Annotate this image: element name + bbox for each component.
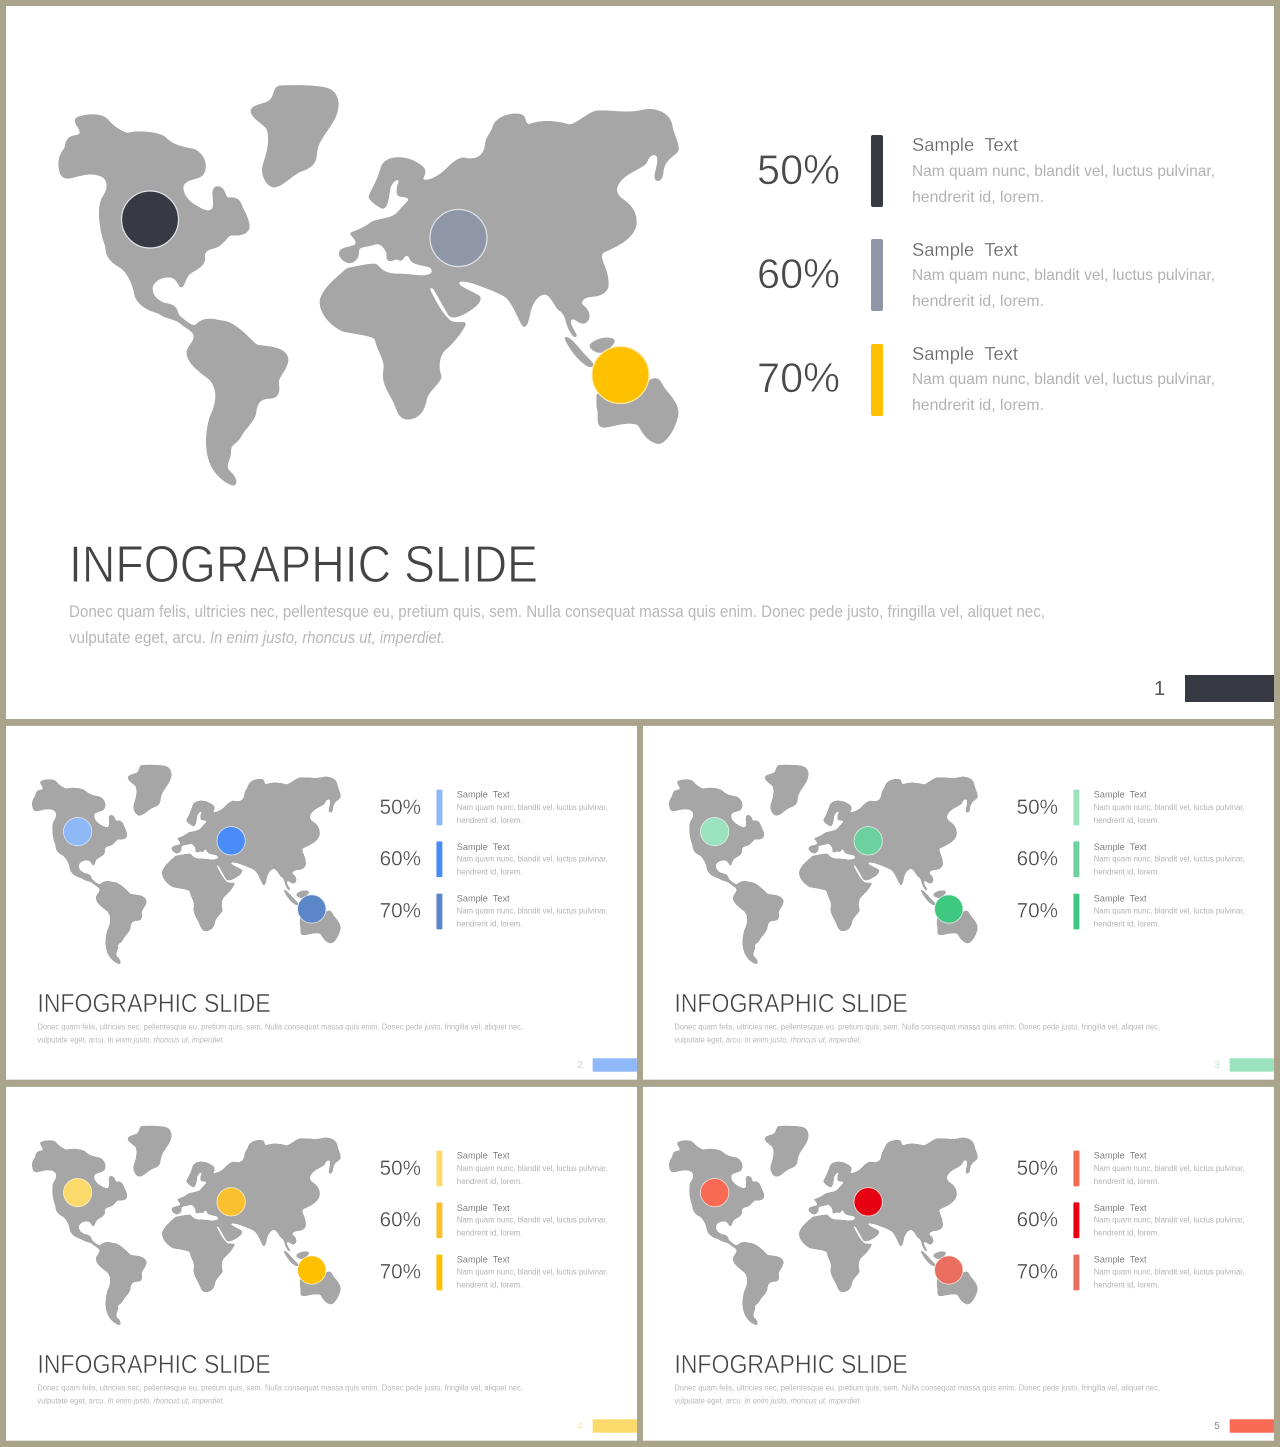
- description: In enim justo, rhoncus ut, imperdiet.: [108, 1035, 224, 1044]
- stat row 70%: Sample Text: [1094, 894, 1147, 904]
- page tab: [1230, 1419, 1274, 1433]
- world map: [59, 85, 679, 486]
- stat row 70%: hendrerit id, lorem.: [457, 919, 523, 928]
- description: vulputate eget, arcu.: [674, 1035, 743, 1044]
- stat row 50%: Nam quam nunc, blandit vel, luctus pulvinar,: [1094, 803, 1245, 812]
- panel: slide 4 yellow: [6, 1087, 637, 1441]
- stat row 60%: Nam quam nunc, blandit vel, luctus pulvinar,: [457, 1216, 608, 1225]
- description: Donec quam felis, ultricies nec, pellentesque eu, pretium quis, sem. Nulla consequat massa quis enim. Donec pede justo, fringilla vel, aliquet nec,: [37, 1383, 523, 1392]
- title: INFOGRAPHIC SLIDE: [37, 990, 271, 1018]
- page number: 5: [1214, 1421, 1220, 1432]
- panel: slide 1 large: [6, 6, 1274, 719]
- description: [37, 1022, 523, 1044]
- page tab: [1185, 675, 1274, 702]
- stat row 70%: [380, 894, 608, 929]
- stat row 70%: Sample Text: [457, 1255, 510, 1265]
- stat row 60%: 60%: [1017, 848, 1058, 871]
- marker: north america: [700, 1178, 729, 1207]
- stat row 70%: Nam quam nunc, blandit vel, luctus pulvinar,: [457, 906, 608, 915]
- stat row 60%: 60%: [380, 1209, 421, 1232]
- marker: eurasia: [854, 1188, 882, 1216]
- description: [674, 1022, 1160, 1044]
- marker: australasia: [298, 895, 326, 923]
- stat row 60%: Sample Text: [1094, 842, 1147, 852]
- stat row 50%: Nam quam nunc, blandit vel, luctus pulvinar,: [1094, 1164, 1245, 1173]
- stat row 50%: [380, 1151, 608, 1186]
- stat row 60%: Sample Text: [457, 1203, 510, 1213]
- marker: australasia: [935, 1256, 963, 1284]
- description: [674, 1383, 1160, 1405]
- description: [37, 1383, 523, 1405]
- stat row 70%: Sample Text: [1094, 1255, 1147, 1265]
- description: vulputate eget, arcu.: [37, 1035, 106, 1044]
- stat row 50%: hendrerit id, lorem.: [1094, 816, 1160, 825]
- stat row 70%: Nam quam nunc, blandit vel, luctus pulvinar,: [912, 371, 1215, 388]
- page number: 4: [577, 1421, 583, 1432]
- stat row 50%: Nam quam nunc, blandit vel, luctus pulvinar,: [457, 1164, 608, 1173]
- description: In enim justo, rhoncus ut, imperdiet.: [108, 1396, 224, 1405]
- marker: australasia: [298, 1256, 326, 1284]
- stat row 70%: Nam quam nunc, blandit vel, luctus pulvinar,: [457, 1267, 608, 1276]
- marker: eurasia: [854, 827, 882, 855]
- stat row 60%: hendrerit id, lorem.: [1094, 1229, 1160, 1238]
- stat row 60%: hendrerit id, lorem.: [912, 293, 1044, 310]
- description: vulputate eget, arcu.: [674, 1396, 743, 1405]
- stat row 70%: 70%: [1017, 899, 1058, 922]
- stat row 70%: [757, 344, 1215, 416]
- page tab: [593, 1058, 637, 1072]
- description: In enim justo, rhoncus ut, imperdiet.: [210, 629, 445, 647]
- description: Donec quam felis, ultricies nec, pellentesque eu, pretium quis, sem. Nulla consequat massa quis enim. Donec pede justo, fringilla vel, aliquet nec,: [37, 1022, 523, 1031]
- stat row 60%: hendrerit id, lorem.: [457, 868, 523, 877]
- marker: australasia: [592, 346, 649, 404]
- stat row 60%: Nam quam nunc, blandit vel, luctus pulvinar,: [1094, 855, 1245, 864]
- stat row 50%: [380, 790, 608, 825]
- marker: north america: [63, 1178, 92, 1207]
- world map: [32, 1126, 341, 1325]
- stat row 50%: Sample Text: [457, 790, 510, 800]
- panel: slide 3 green: [643, 726, 1274, 1080]
- page tab: [593, 1419, 637, 1433]
- stat row 70%: 70%: [1017, 1260, 1058, 1283]
- stat row 70%: [380, 1255, 608, 1290]
- stat row 70%: 70%: [380, 1260, 421, 1283]
- stat row 50%: [757, 135, 1215, 207]
- stat row 50%: 50%: [380, 796, 421, 819]
- description: [69, 603, 1045, 647]
- title: INFOGRAPHIC SLIDE: [674, 1351, 908, 1379]
- page number: 2: [577, 1060, 583, 1071]
- stat row 60%: [380, 1202, 608, 1238]
- stat row 60%: [1017, 841, 1245, 877]
- stat row 60%: [1017, 1202, 1245, 1238]
- description: Donec quam felis, ultricies nec, pellentesque eu, pretium quis, sem. Nulla consequat massa quis enim. Donec pede justo, fringilla vel, aliquet nec,: [674, 1383, 1160, 1392]
- stat row 60%: Nam quam nunc, blandit vel, luctus pulvinar,: [1094, 1216, 1245, 1225]
- world map: [669, 1126, 978, 1325]
- stat row 60%: Sample Text: [1094, 1203, 1147, 1213]
- stat row 70%: hendrerit id, lorem.: [1094, 1280, 1160, 1289]
- stat row 50%: hendrerit id, lorem.: [912, 189, 1044, 206]
- stat row 50%: 50%: [1017, 1157, 1058, 1180]
- title: INFOGRAPHIC SLIDE: [674, 990, 908, 1018]
- page number: 3: [1214, 1060, 1220, 1071]
- stat row 50%: Sample Text: [457, 1151, 510, 1161]
- page number: 1: [1154, 678, 1165, 700]
- title: INFOGRAPHIC SLIDE: [69, 536, 538, 594]
- page tab: [1230, 1058, 1274, 1072]
- marker: north america: [122, 191, 178, 248]
- stat row 60%: [757, 239, 1215, 311]
- marker: north america: [63, 817, 92, 846]
- stat row 70%: Nam quam nunc, blandit vel, luctus pulvinar,: [1094, 906, 1245, 915]
- description: vulputate eget, arcu.: [37, 1396, 106, 1405]
- stat row 60%: Nam quam nunc, blandit vel, luctus pulvinar,: [912, 267, 1215, 284]
- stat row 50%: 50%: [757, 146, 840, 193]
- stat row 60%: Sample Text: [912, 240, 1018, 260]
- stat row 60%: 60%: [757, 250, 840, 297]
- stat row 50%: Sample Text: [1094, 790, 1147, 800]
- description: In enim justo, rhoncus ut, imperdiet.: [745, 1035, 861, 1044]
- description: Donec quam felis, ultricies nec, pellentesque eu, pretium quis, sem. Nulla consequat massa quis enim. Donec pede justo, fringilla vel, aliquet nec,: [69, 603, 1045, 621]
- stat row 60%: 60%: [380, 848, 421, 871]
- stat row 70%: hendrerit id, lorem.: [912, 397, 1044, 414]
- marker: north america: [700, 817, 729, 846]
- world map: [669, 765, 978, 964]
- stat row 50%: hendrerit id, lorem.: [1094, 1177, 1160, 1186]
- stat row 50%: hendrerit id, lorem.: [457, 1177, 523, 1186]
- stat row 70%: Sample Text: [912, 344, 1018, 364]
- stat row 70%: hendrerit id, lorem.: [457, 1280, 523, 1289]
- stat row 50%: Nam quam nunc, blandit vel, luctus pulvinar,: [912, 163, 1215, 180]
- marker: eurasia: [217, 827, 245, 855]
- panel: slide 2 blue: [6, 726, 637, 1080]
- marker: australasia: [935, 895, 963, 923]
- stat row 60%: Nam quam nunc, blandit vel, luctus pulvinar,: [457, 855, 608, 864]
- world map: [32, 765, 341, 964]
- stat row 60%: Sample Text: [457, 842, 510, 852]
- stat row 70%: [1017, 1255, 1245, 1290]
- stat row 50%: 50%: [1017, 796, 1058, 819]
- stat row 70%: 70%: [757, 354, 840, 401]
- stat row 60%: hendrerit id, lorem.: [1094, 868, 1160, 877]
- description: vulputate eget, arcu.: [69, 629, 206, 647]
- stat row 70%: [1017, 894, 1245, 929]
- description: In enim justo, rhoncus ut, imperdiet.: [745, 1396, 861, 1405]
- stat row 50%: Sample Text: [1094, 1151, 1147, 1161]
- stat row 50%: hendrerit id, lorem.: [457, 816, 523, 825]
- stat row 50%: Nam quam nunc, blandit vel, luctus pulvinar,: [457, 803, 608, 812]
- stat row 50%: 50%: [380, 1157, 421, 1180]
- stat row 70%: Nam quam nunc, blandit vel, luctus pulvinar,: [1094, 1267, 1245, 1276]
- stat row 50%: [1017, 790, 1245, 825]
- stat row 60%: hendrerit id, lorem.: [457, 1229, 523, 1238]
- stat row 50%: [1017, 1151, 1245, 1186]
- stat row 60%: 60%: [1017, 1209, 1058, 1232]
- description: Donec quam felis, ultricies nec, pellentesque eu, pretium quis, sem. Nulla consequat massa quis enim. Donec pede justo, fringilla vel, aliquet nec,: [674, 1022, 1160, 1031]
- stat row 70%: 70%: [380, 899, 421, 922]
- stat row 70%: hendrerit id, lorem.: [1094, 919, 1160, 928]
- panel: slide 5 red: [643, 1087, 1274, 1441]
- title: INFOGRAPHIC SLIDE: [37, 1351, 271, 1379]
- stat row 70%: Sample Text: [457, 894, 510, 904]
- stat row 50%: Sample Text: [912, 135, 1018, 155]
- marker: eurasia: [217, 1188, 245, 1216]
- stat row 60%: [380, 841, 608, 877]
- marker: eurasia: [430, 210, 487, 266]
